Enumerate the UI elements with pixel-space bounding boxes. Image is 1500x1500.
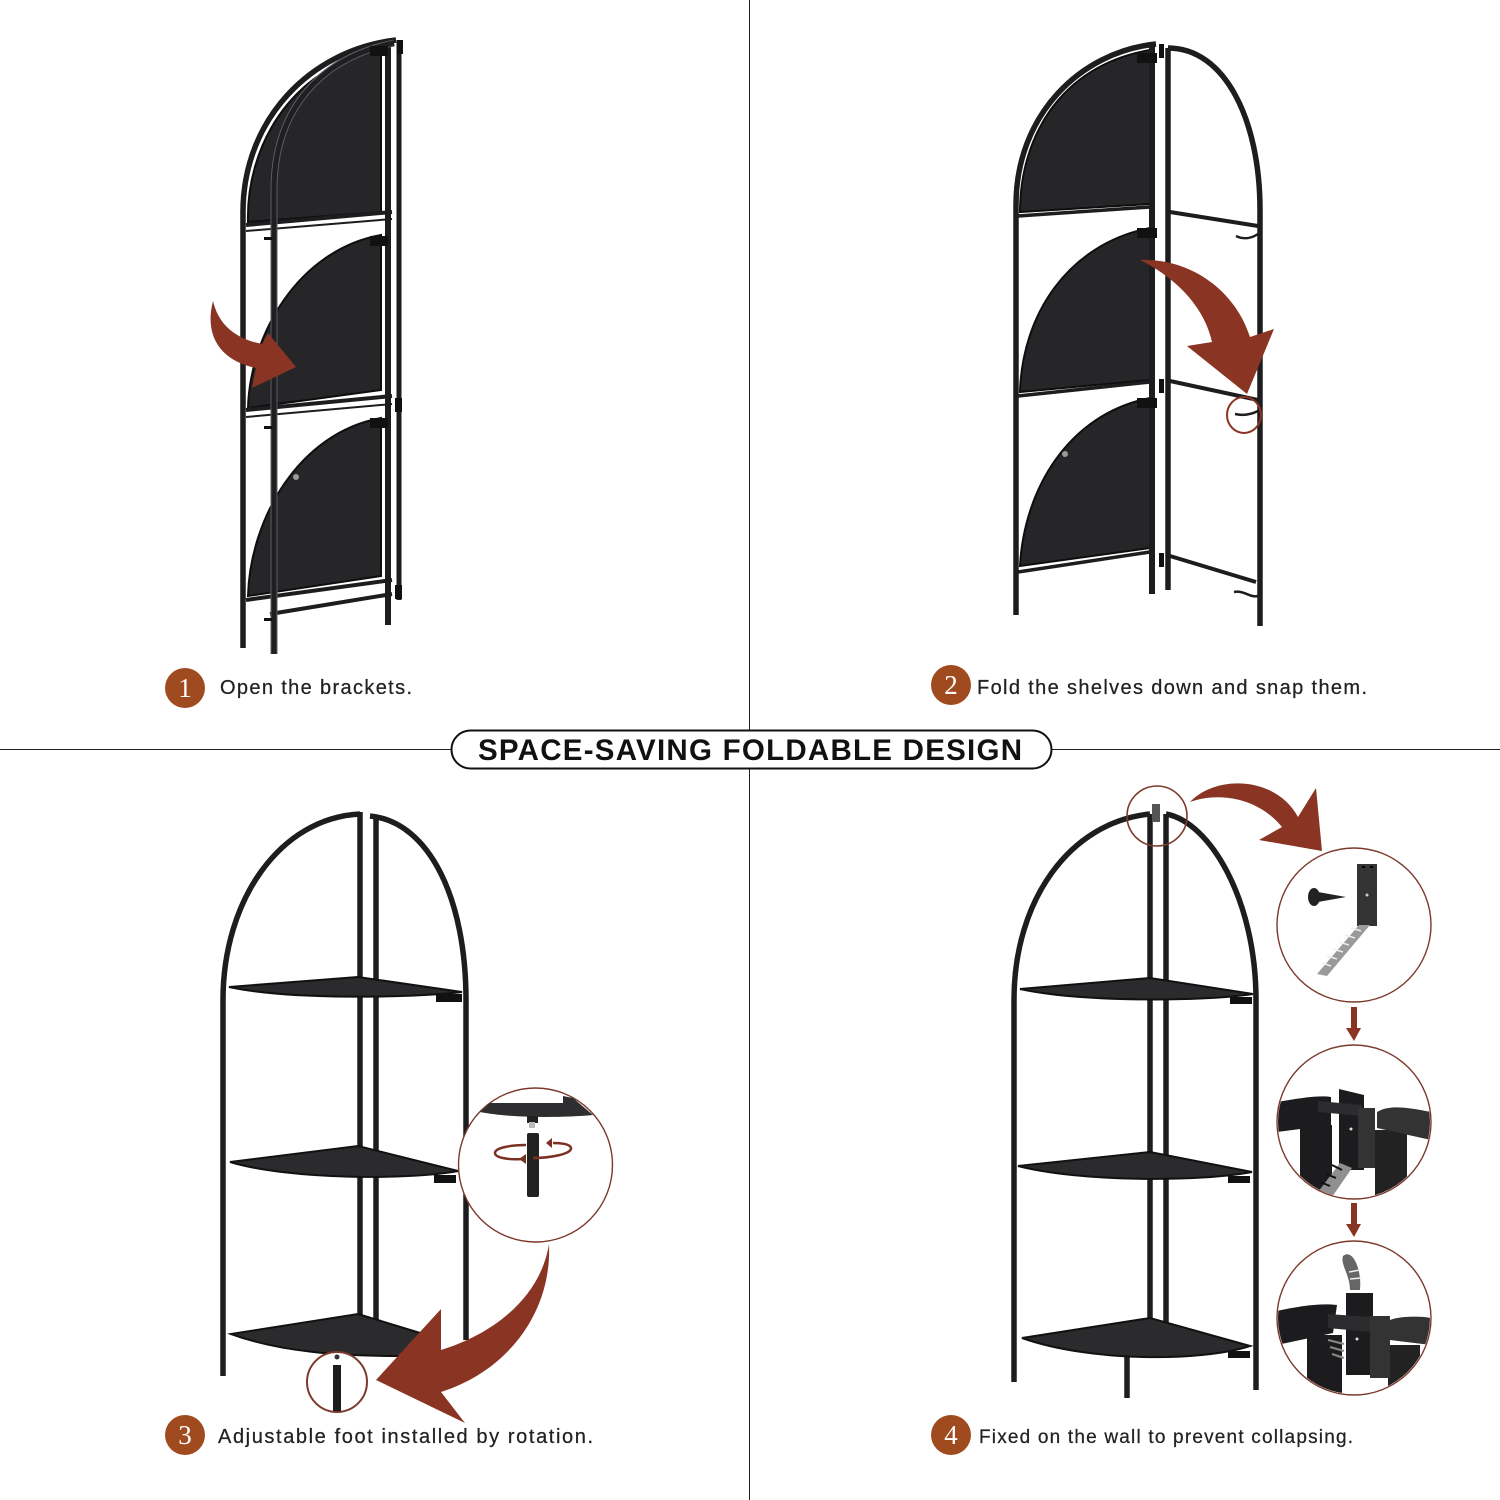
arrow down	[1346, 1203, 1361, 1237]
zoom detail: rotating foot	[458, 1088, 612, 1242]
detail: bracket on frame	[1277, 1045, 1431, 1205]
arrow	[376, 1244, 549, 1423]
step 3 caption: 3	[178, 1420, 192, 1450]
title: SPACE-SAVING FOLDABLE DESIGN	[478, 734, 1022, 767]
panel: step 2 opening rack	[1016, 44, 1274, 626]
frame tubes	[243, 40, 399, 654]
highlight ring	[1227, 397, 1261, 433]
arrow	[211, 301, 296, 388]
arrow	[1190, 783, 1322, 851]
step 1 caption: 1	[178, 673, 192, 703]
detail: screw and strap	[1277, 848, 1431, 1002]
panel: step 3 open rack	[223, 812, 612, 1423]
panel: step 4 wall-fixed rack	[1014, 783, 1431, 1398]
step 1 caption: Open the brackets.	[220, 677, 412, 699]
step 4 caption	[931, 1415, 1353, 1455]
step 2 caption	[931, 665, 1367, 705]
wall bracket ring	[1127, 786, 1187, 846]
shelves	[229, 977, 462, 1356]
panel: step 1 folded rack	[211, 40, 403, 654]
detail: strap tightened	[1277, 1241, 1431, 1395]
step 2 caption: Fold the shelves down and snap them.	[977, 677, 1367, 699]
arrow	[1140, 260, 1274, 394]
step 3 caption	[165, 1415, 593, 1455]
arrow down	[1346, 1007, 1361, 1041]
step 1 caption	[165, 668, 412, 708]
step 4 caption: 4	[944, 1420, 958, 1450]
shelves folded	[248, 50, 381, 596]
step 3 caption: Adjustable foot installed by rotation.	[218, 1426, 593, 1448]
foot ring	[307, 1352, 367, 1412]
step 2 caption: 2	[944, 670, 958, 700]
step 4 caption: Fixed on the wall to prevent collapsing.	[979, 1427, 1353, 1448]
